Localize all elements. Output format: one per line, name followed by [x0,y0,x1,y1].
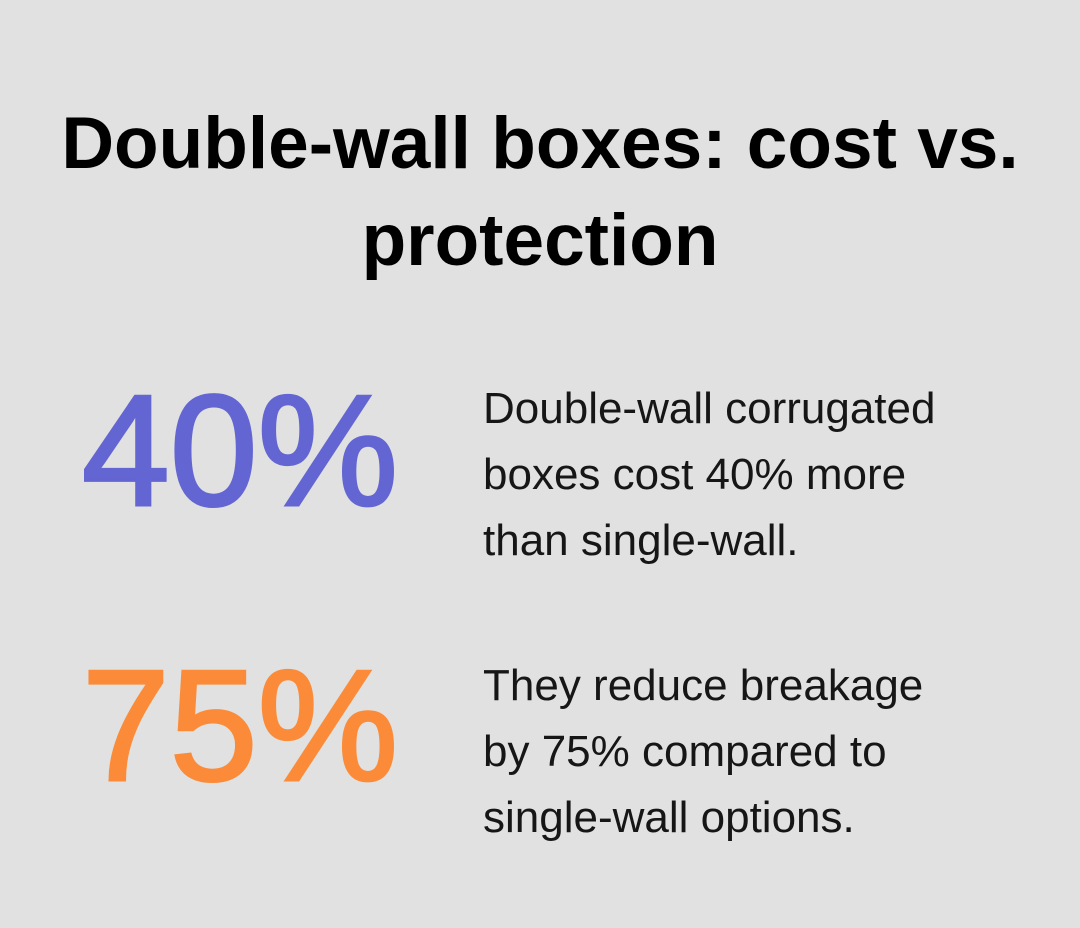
text: breakage [483,661,923,842]
text: cost [483,384,935,565]
title: Double-wall boxes: cost vs. [61,103,1019,184]
title [61,103,1019,281]
text: breakage: They reduce breakage [483,661,923,710]
stat: 40%: 40% [82,363,398,539]
text: breakage: by 75% compared to [483,727,887,776]
text: cost: than single-wall. [483,516,798,565]
text: cost: boxes cost 40% more [483,450,906,499]
text: breakage: single-wall options. [483,793,855,842]
text: cost: Double-wall corrugated [483,384,935,433]
title: protection [362,200,718,281]
stat: 75%: 75% [82,638,398,814]
